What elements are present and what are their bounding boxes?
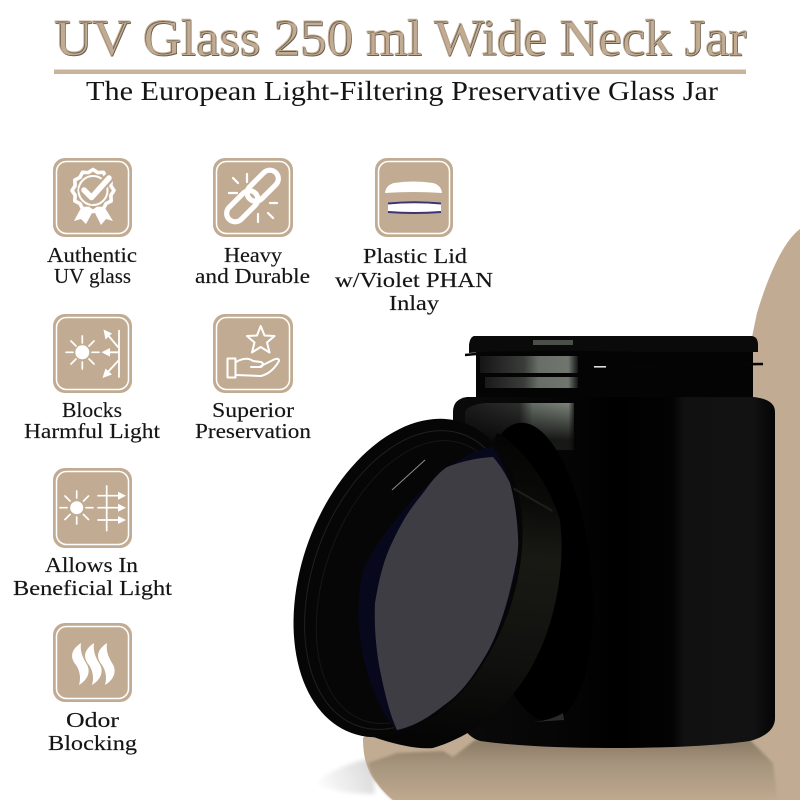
label <box>195 243 310 288</box>
label <box>24 398 160 443</box>
label: and Durable <box>195 264 310 288</box>
feature: superior preservation <box>195 314 312 443</box>
jar neck <box>476 344 753 397</box>
lid skirt glare <box>513 487 553 512</box>
jar floor reflection <box>368 740 777 800</box>
label <box>13 553 172 600</box>
lid shadow on jar <box>464 417 606 727</box>
title rule <box>54 70 746 74</box>
lid inlay grey reflection <box>375 457 518 730</box>
tan background shape <box>363 229 800 800</box>
lower highlight sliver <box>533 713 564 722</box>
feature: authentic UV glass <box>47 158 137 288</box>
label: w/Violet PHAN <box>335 268 493 292</box>
label: Plastic Lid <box>363 244 468 268</box>
label: Harmful Light <box>24 419 160 443</box>
feature: heavy and durable <box>195 158 310 288</box>
rim highlight <box>533 340 573 345</box>
icon: hand and star <box>213 314 293 393</box>
lid inlay navy <box>358 447 518 731</box>
glass jar <box>453 336 775 748</box>
label: Inlay <box>389 291 440 315</box>
jar body <box>453 397 775 748</box>
label: Authentic <box>47 243 137 267</box>
grey floor reflection <box>316 758 375 794</box>
screw lid <box>252 387 564 769</box>
label: Blocks <box>62 398 122 422</box>
lid thread line inner <box>280 414 546 750</box>
label: Preservation <box>195 419 312 443</box>
jar shoulder highlight <box>465 403 574 451</box>
label <box>47 243 137 288</box>
label <box>335 244 493 315</box>
label: Blocking <box>48 731 138 755</box>
feature: odor blocking <box>48 623 138 755</box>
icon: lid <box>375 158 453 237</box>
lid skirt <box>363 433 562 748</box>
subtitle: The European Light-Filtering Preservative Glass Jar <box>86 76 718 106</box>
lid thread glint <box>392 460 425 490</box>
label: Beneficial Light <box>13 576 172 600</box>
label <box>48 708 138 755</box>
icon: chain link <box>213 158 293 237</box>
neck threads <box>465 347 763 367</box>
label: Superior <box>212 398 294 422</box>
neck glint <box>594 366 606 368</box>
icon: odor waves <box>53 623 132 702</box>
label: Odor <box>66 708 119 732</box>
label: UV glass <box>54 264 131 288</box>
lid rim <box>252 387 564 769</box>
title: UV Glass 250 ml Wide Neck Jar <box>54 10 746 66</box>
feature: blocks harmful light <box>24 314 160 443</box>
label: Allows In <box>45 553 139 577</box>
neck highlight bands <box>480 356 578 388</box>
label: Heavy <box>224 243 283 267</box>
icon: sun and barrier <box>53 314 132 393</box>
lid thread line <box>266 401 554 759</box>
jar rim <box>469 336 758 353</box>
feature: allows in beneficial light <box>13 468 172 600</box>
feature: plastic lid <box>335 158 493 315</box>
label <box>195 398 312 443</box>
icon: award badge <box>53 158 132 237</box>
icon: sun and filter <box>53 468 132 548</box>
